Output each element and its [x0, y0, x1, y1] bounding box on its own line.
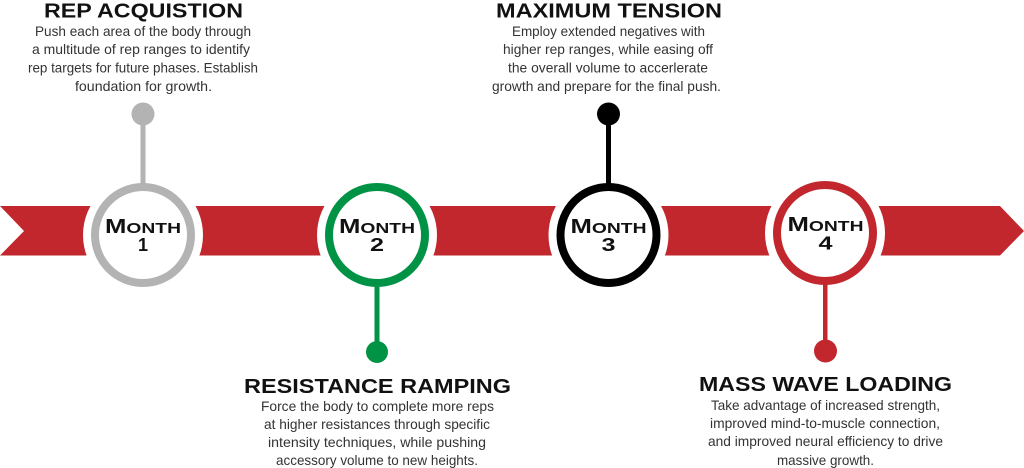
heading: resistance ramping: RESISTANCE RAMPING — [244, 376, 511, 398]
description: mass wave loading: improved mind-to-muscle connection, — [710, 415, 940, 431]
description: rep acquistion: a multitude of rep ranges to identify — [32, 41, 250, 57]
description: mass wave loading — [708, 397, 943, 468]
month 4 label: M ONTH — [788, 214, 864, 236]
description: maximum tension: the overall volume to accerlerate — [508, 60, 708, 76]
description: maximum tension — [492, 23, 721, 94]
month 3 halo — [548, 175, 668, 295]
panel: month 1 — [28, 0, 258, 295]
red ribbon arrow — [0, 206, 1024, 256]
description: mass wave loading: massive growth. — [777, 452, 874, 468]
month 2 label: 2 — [370, 235, 384, 255]
description: rep acquistion — [28, 23, 258, 94]
description: maximum tension: Employ extended negatives with — [512, 23, 705, 39]
month 3 label: 3 — [602, 235, 616, 255]
description: resistance ramping — [261, 398, 494, 468]
panel: month 2 — [244, 175, 511, 468]
heading: maximum tension: MAXIMUM TENSION — [496, 0, 722, 22]
month 2 halo — [317, 175, 437, 295]
description: resistance ramping: at higher resistances through specific — [264, 416, 490, 432]
month 4 pin — [814, 283, 837, 362]
month 1 label: M ONTH — [105, 216, 181, 238]
panel: month 3 — [492, 0, 722, 295]
month 3 ring — [560, 187, 656, 283]
month 4 ring — [777, 185, 873, 281]
month 1 label — [105, 216, 181, 255]
month 2 ring — [329, 187, 425, 283]
month 2 label — [339, 216, 415, 255]
description: mass wave loading: Take advantage of increased strength, — [711, 397, 940, 413]
description: maximum tension: growth and prepare for the final push. — [492, 78, 721, 94]
panel: month 4 — [699, 173, 952, 468]
heading: rep acquistion: REP ACQUISTION — [44, 0, 243, 22]
month 3 label — [570, 216, 646, 255]
month 3 pin — [597, 102, 620, 186]
month 3 label: M ONTH — [570, 216, 646, 238]
month 2 label: M ONTH — [339, 216, 415, 238]
month 4 halo — [765, 173, 885, 293]
heading: mass wave loading: MASS WAVE LOADING — [699, 374, 952, 396]
description: rep acquistion: Push each area of the body through — [35, 23, 251, 39]
month 4 label: 4 — [818, 234, 832, 254]
month 4 label — [788, 214, 864, 254]
description: rep acquistion: foundation for growth. — [75, 78, 212, 94]
month 1 ring — [95, 187, 191, 283]
description: resistance ramping: intensity techniques, while pushing — [268, 434, 486, 450]
month 1 label: 1 — [138, 235, 148, 255]
description: resistance ramping: accessory volume to new heights. — [276, 452, 478, 468]
month 1 pin — [132, 102, 154, 186]
description: mass wave loading: and improved neural efficiency to drive — [708, 433, 943, 449]
description: resistance ramping: Force the body to complete more reps — [261, 398, 494, 414]
description: maximum tension: higher rep ranges, while easing off — [503, 41, 713, 57]
description: rep acquistion: rep targets for future phases. Establish — [28, 60, 258, 76]
month 2 pin — [366, 285, 388, 363]
month 1 halo — [83, 175, 203, 295]
